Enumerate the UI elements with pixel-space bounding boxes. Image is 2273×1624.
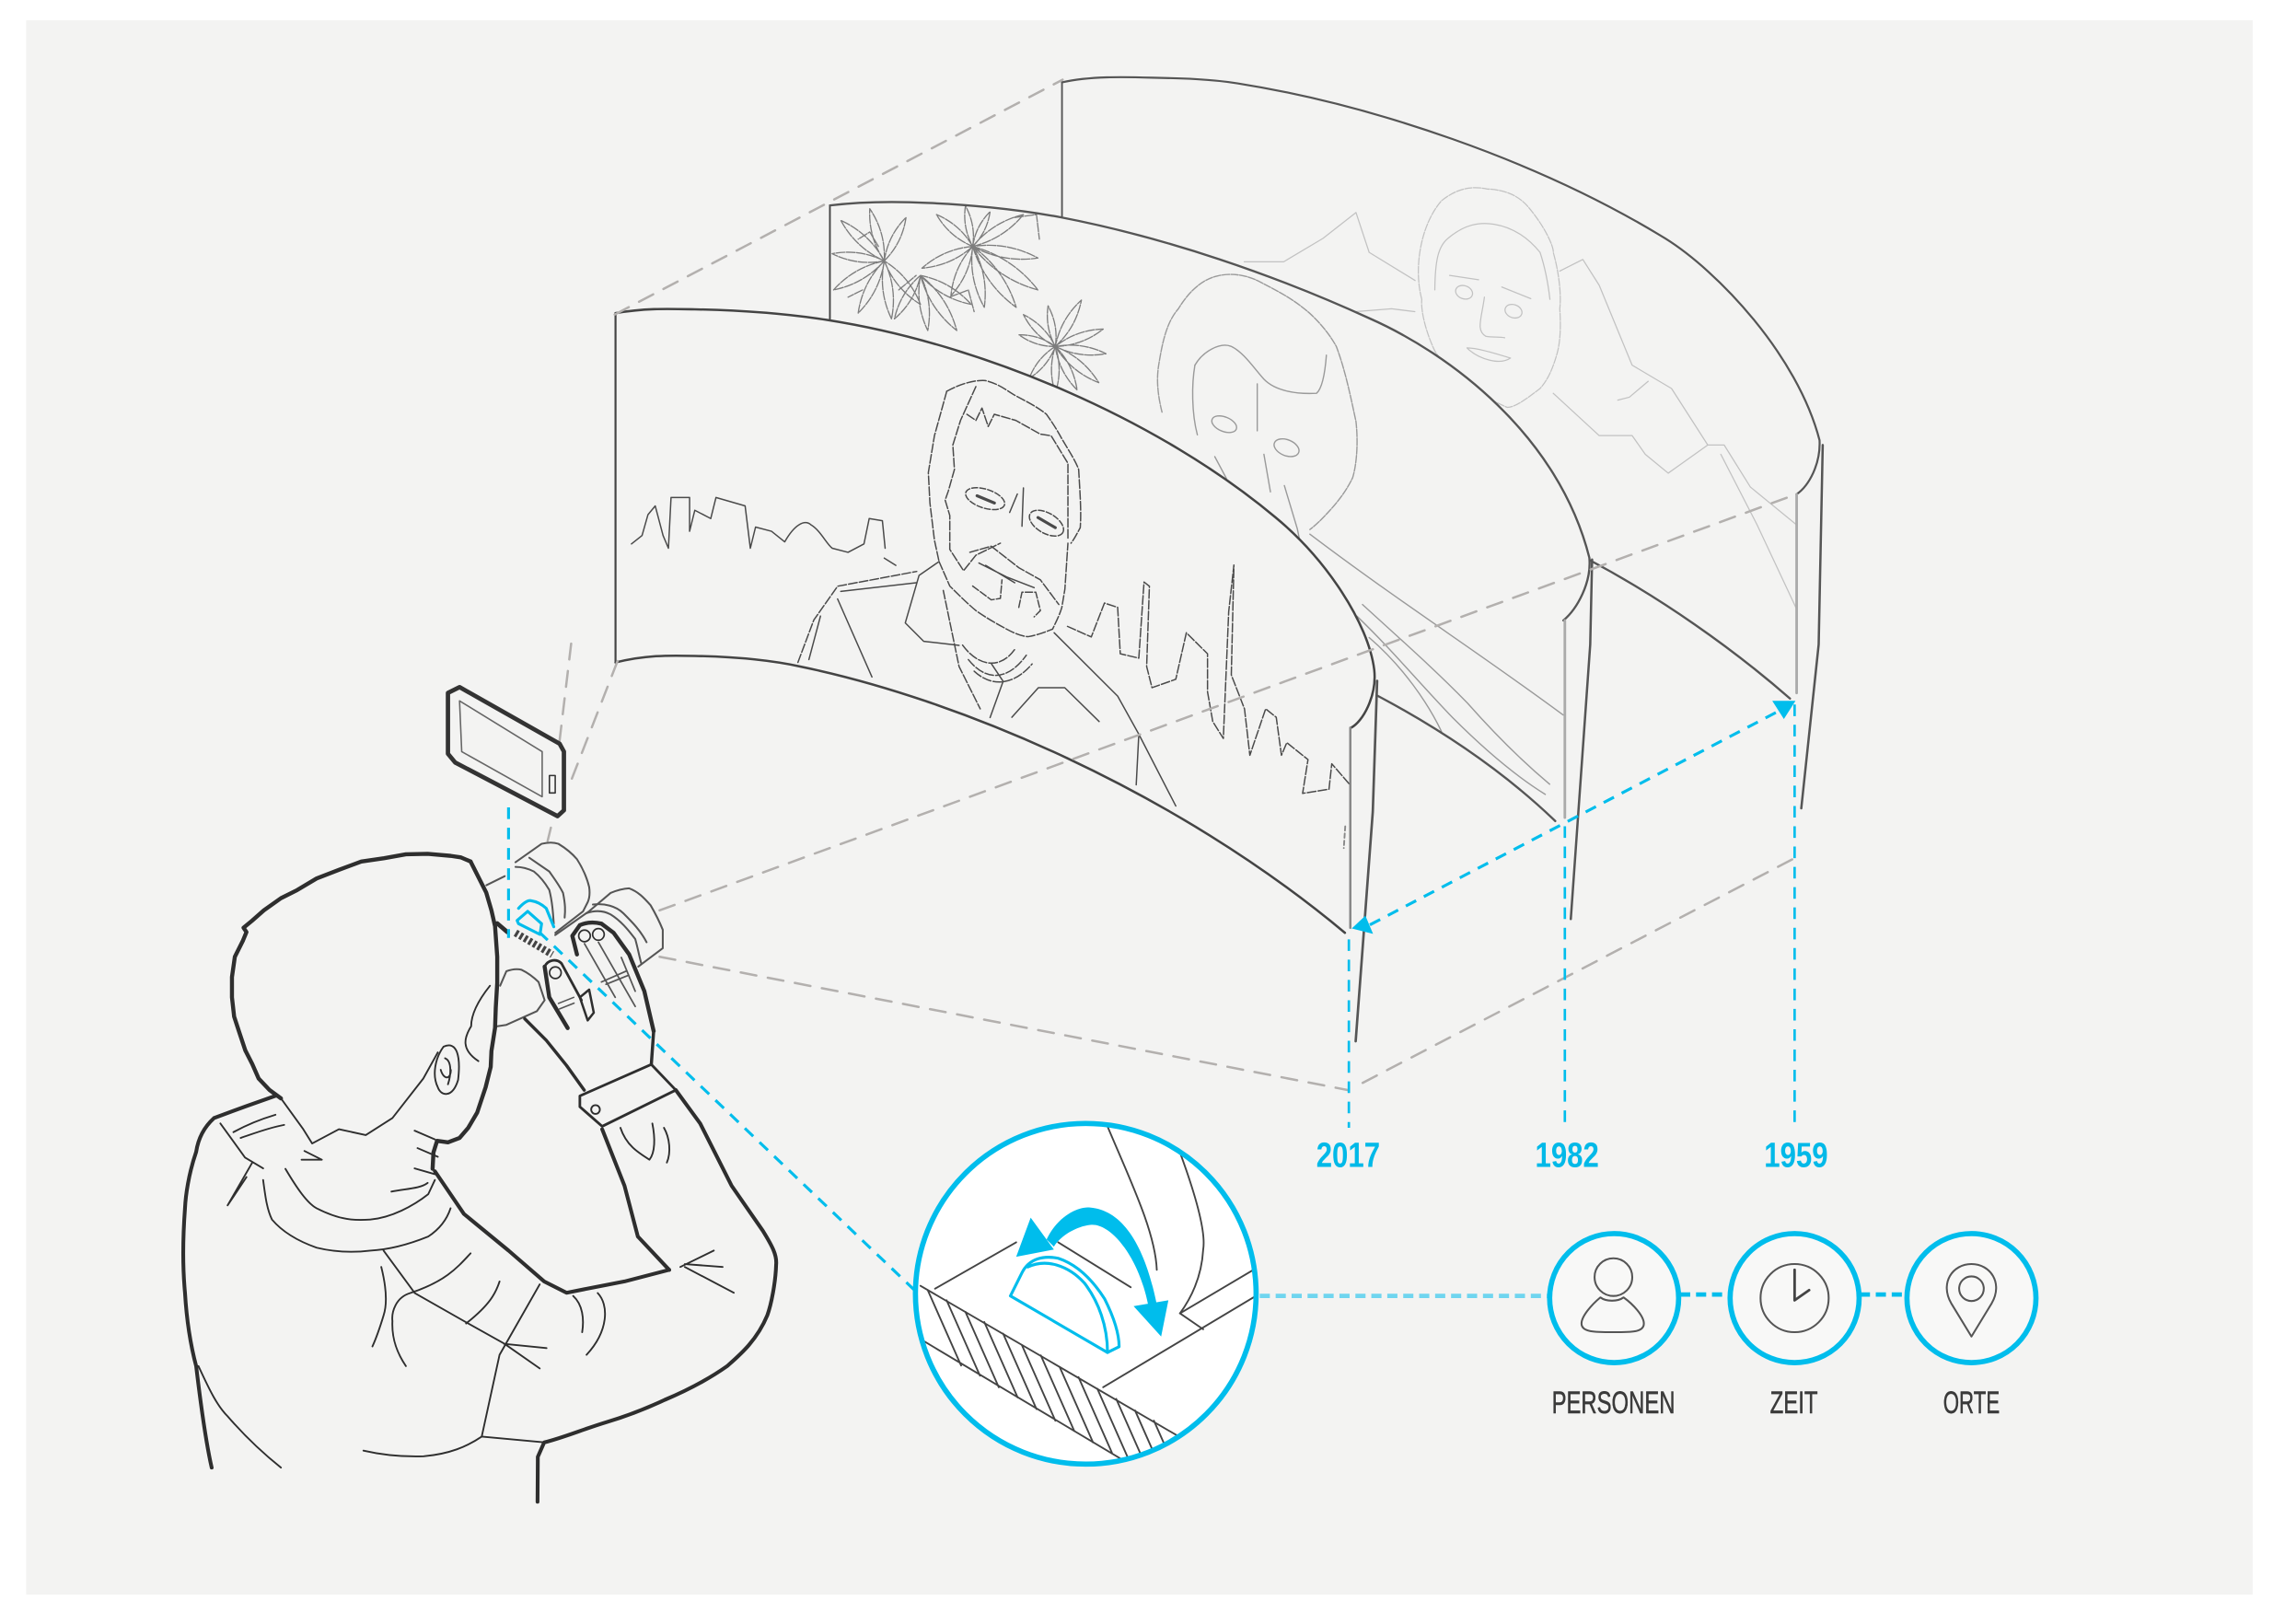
cyan half dome wheel (1011, 1258, 1119, 1352)
binoculars (486, 842, 663, 1027)
panel: middle screen 1982 (829, 202, 1592, 919)
hair (232, 853, 470, 1098)
panel: back screen 1959 (1062, 77, 1823, 808)
portrait: woman and mountains (1244, 188, 1796, 609)
torso and arm outlines (183, 1096, 276, 1467)
folds and seams (220, 1115, 734, 1456)
year labels: 1982 (1536, 1137, 1599, 1176)
small blue dome on binoculars (517, 900, 554, 934)
gray dashed projection lines (548, 80, 1796, 1090)
lens barrel upper (486, 842, 589, 933)
inner hairline (945, 387, 1001, 571)
icon: person (1549, 1234, 1678, 1363)
ear and neck (435, 1045, 459, 1094)
year labels: 1959 (1764, 1137, 1828, 1176)
eyes and nose (963, 483, 1007, 514)
icon labels: ORTE (1943, 1386, 2000, 1421)
phone (448, 687, 564, 816)
flowers (832, 206, 1106, 393)
icon labels: ZEIT (1770, 1386, 1818, 1421)
hand (525, 1019, 585, 1090)
year labels: 2017 (1316, 1137, 1380, 1176)
icon labels: PERSONEN (1552, 1386, 1675, 1421)
edge lines (615, 313, 617, 663)
year labels (1316, 1137, 1828, 1176)
blue dashed lines (508, 704, 1794, 1294)
magnified detail circle (915, 1123, 1258, 1496)
icon: location pin (1907, 1234, 2036, 1363)
focus wheel hatching (516, 933, 552, 955)
skyline left (632, 497, 885, 552)
arrow heads (1351, 701, 1795, 934)
head outer hair (946, 380, 1081, 543)
jaw (939, 543, 1068, 637)
icon: clock (1730, 1234, 1859, 1363)
curved double arrow (1016, 1207, 1168, 1337)
person with binoculars (183, 842, 776, 1502)
moustache and beard (969, 546, 1059, 605)
skyline right (1068, 565, 1351, 794)
portrait: older man with skyline (632, 380, 1351, 806)
edge lines (829, 205, 830, 320)
connector dashes (1259, 1294, 1905, 1296)
lens barrel lower (555, 888, 663, 967)
portrait: young man (1157, 274, 1563, 795)
shoulders and jacket (798, 572, 917, 663)
panel: front screen 2017 (616, 309, 1377, 1041)
watch cuff (580, 1064, 676, 1126)
eyepiece (497, 969, 545, 1027)
icon labels (1552, 1386, 2000, 1421)
collar (285, 1169, 435, 1220)
edge lines (1061, 82, 1063, 217)
